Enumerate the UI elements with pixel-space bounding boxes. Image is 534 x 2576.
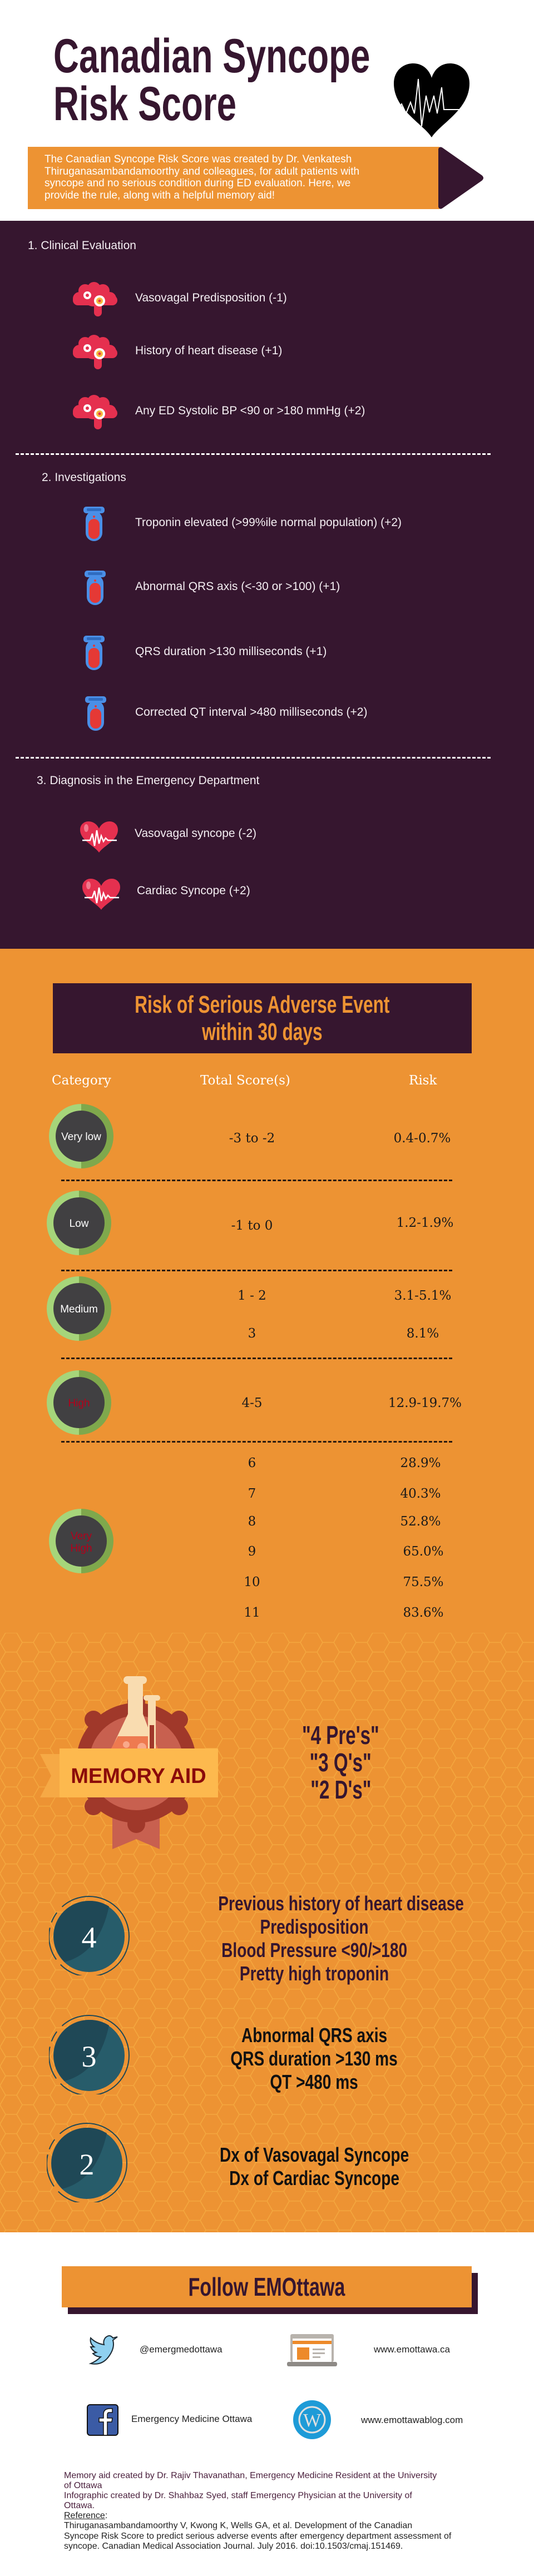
row: high: High — [68, 1398, 90, 1409]
item: history of heart disease: History of heart disease (+1) — [135, 344, 282, 357]
row: low: Low — [70, 1218, 89, 1230]
panel: risk table (orange): 83.6% — [403, 1606, 444, 1620]
mnemonic: 2 D's — [220, 2143, 409, 2189]
intro text: provide the rule, along with a helpful memory aid! — [44, 190, 275, 201]
follow EMOttawa banner — [62, 2266, 478, 2314]
mnemonic: 2 D's: Dx of Vasovagal Syncope — [220, 2143, 409, 2166]
group 3: circle + text — [49, 2015, 398, 2094]
intro text: syncope and no serious condition during ED evaluation. Here, we — [44, 177, 350, 189]
follow EMOttawa banner: Follow EMOttawa — [189, 2272, 345, 2301]
row: very low: -3 to -2 — [229, 1131, 275, 1146]
row: very high: 6 — [248, 1456, 256, 1470]
icon: memory aid badge — [40, 1676, 218, 1849]
risk title box: within 30 days — [202, 1018, 323, 1046]
row: high: 12.9-19.7% — [388, 1396, 462, 1410]
risk title box — [53, 983, 472, 1053]
footer credits and reference: Syncope Risk Score to predict serious adverse events after emergency department assessment of — [64, 2532, 451, 2541]
item: QT interval — [85, 696, 367, 731]
item: QRS axis — [85, 571, 340, 605]
social: facebook — [87, 2404, 253, 2436]
group 4: circle + text: 4 — [81, 1921, 97, 1954]
item: vasovagal predisposition: Vasovagal Predisposition (-1) — [135, 291, 287, 304]
group 4: circle + text — [49, 1892, 464, 1985]
mnemonic: 3 Q's — [231, 2024, 398, 2093]
item: QRS duration — [83, 636, 327, 670]
item: vasovagal syncope — [80, 821, 256, 853]
row: very high: 9 — [248, 1544, 256, 1559]
footer credits and reference: Thiruganasambandamoorthy V, Kwong K, Wells GA, et al. Development of the Canadian — [64, 2521, 412, 2530]
row: medium: 8.1% — [407, 1326, 439, 1341]
footer credits and reference — [64, 2471, 452, 2551]
social: twitter — [89, 2335, 222, 2365]
row: medium: 1 - 2 — [238, 1289, 266, 1303]
social: wordpress blog: W — [303, 2410, 322, 2431]
table header: Total Score(s) — [200, 1073, 290, 1088]
item: QRS duration: QRS duration >130 milliseconds (+1) — [135, 645, 327, 658]
row: very low: 0.4-0.7% — [394, 1131, 451, 1146]
memory aid summary — [302, 1721, 379, 1804]
table header: Category — [52, 1073, 111, 1088]
row: medium: 3.1-5.1% — [394, 1289, 451, 1303]
heading: diagnosis: 3. Diagnosis in the Emergency Department — [37, 774, 259, 787]
item: troponin — [83, 507, 402, 541]
panel: risk table (orange): 75.5% — [403, 1575, 444, 1589]
row: very low: Very low — [61, 1131, 101, 1143]
social: wordpress blog — [293, 2400, 463, 2439]
risk title box: Risk of Serious Adverse Event — [135, 991, 390, 1018]
row: very high: 52.8% — [400, 1514, 441, 1529]
item: vasovagal syncope: Vasovagal syncope (-2) — [135, 827, 256, 840]
social: wordpress blog: www.emottawablog.com — [361, 2415, 463, 2425]
footer credits and reference: Ottawa. — [64, 2501, 95, 2510]
row: medium: Medium — [60, 1304, 98, 1315]
row: low: -1 to 0 — [231, 1218, 273, 1233]
item: systolic BP: Any ED Systolic BP <90 or >180 mmHg (+2) — [135, 404, 365, 417]
intro text — [44, 153, 359, 201]
intro text: Thiruganasambandamoorthy and colleagues, for adult patients with — [44, 166, 359, 177]
memory aid summary: "2 D's" — [310, 1775, 371, 1804]
panel: criteria (dark) — [0, 221, 534, 949]
row: very high: 28.9% — [400, 1456, 441, 1470]
social: website — [287, 2334, 450, 2366]
row: very high: 8 — [248, 1514, 256, 1529]
header: title — [53, 29, 370, 131]
social: website: www.emottawa.ca — [374, 2344, 450, 2355]
intro text: The Canadian Syncope Risk Score was created by Dr. Venkatesh — [44, 153, 352, 165]
row: very high: Very — [71, 1530, 92, 1542]
group 3: circle + text: 3 — [81, 2040, 97, 2073]
mnemonic: 4 Pre's: Blood Pressure <90/>180 — [221, 1939, 407, 1961]
item: QT interval: Corrected QT interval >480 milliseconds (+2) — [135, 706, 367, 719]
footer credits and reference: syncope. Canadian Medical Association Journal. July 2016. doi:10.1503/cmaj.151469. — [64, 2542, 403, 2551]
table header — [52, 1073, 437, 1088]
item: troponin: Troponin elevated (>99%ile normal population) (+2) — [135, 516, 402, 529]
row: very low — [49, 1104, 451, 1168]
row: high — [47, 1370, 462, 1435]
item: systolic BP — [73, 395, 365, 429]
row: medium — [47, 1276, 451, 1341]
row: low — [47, 1191, 453, 1255]
heading: investigations: 2. Investigations — [42, 471, 126, 484]
icon: heart with ECG — [394, 63, 469, 137]
item: history of heart disease — [73, 335, 282, 369]
row: high: 4-5 — [241, 1396, 263, 1410]
panel: risk table (orange) — [0, 949, 534, 1633]
social: twitter: @emergmedottawa — [140, 2344, 222, 2355]
header: title: Risk Score — [53, 77, 236, 131]
panel: memory aid (hex pattern) — [0, 1633, 534, 2232]
intro callout banner — [28, 147, 483, 209]
mnemonic: 4 Pre's: Predisposition — [260, 1915, 369, 1938]
group 2: circle + text — [47, 2123, 409, 2202]
mnemonic: 3 Q's: QT >480 ms — [270, 2070, 358, 2093]
footer credits and reference: Reference: — [64, 2511, 107, 2520]
panel: risk table (orange): 11 — [244, 1606, 260, 1620]
footer credits and reference: of Ottawa — [64, 2481, 102, 2490]
row: low: 1.2-1.9% — [397, 1216, 453, 1230]
row: very high: 7 — [248, 1487, 256, 1501]
row: very high — [49, 1456, 444, 1620]
row: very high: High — [70, 1543, 92, 1554]
mnemonic: 3 Q's: Abnormal QRS axis — [241, 2024, 387, 2047]
item: QRS axis: Abnormal QRS axis (<-30 or >100) (+1) — [135, 580, 340, 593]
mnemonic: 3 Q's: QRS duration >130 ms — [231, 2047, 398, 2070]
mnemonic: 4 Pre's: Previous history of heart disease — [218, 1892, 464, 1915]
mnemonic: 4 Pre's — [218, 1892, 464, 1985]
row: very high: 65.0% — [403, 1544, 444, 1559]
table header: Risk — [409, 1073, 437, 1088]
memory aid summary: "3 Q's" — [310, 1748, 372, 1777]
icon: memory aid badge: MEMORY AID — [71, 1765, 206, 1788]
social: facebook: Emergency Medicine Ottawa — [131, 2414, 252, 2424]
row: medium: 3 — [248, 1326, 256, 1341]
group 2: circle + text: 2 — [79, 2148, 95, 2181]
heading: clinical evaluation: 1. Clinical Evaluation — [28, 239, 136, 252]
row: very high: 40.3% — [400, 1487, 441, 1501]
header: title: Canadian Syncope — [53, 29, 370, 83]
item: cardiac syncope — [82, 879, 250, 910]
mnemonic: 2 D's: Dx of Cardiac Syncope — [229, 2167, 399, 2189]
footer credits and reference: Infographic created by Dr. Shahbaz Syed, staff Emergency Physician at the University of — [64, 2491, 412, 2500]
panel: risk table (orange): 10 — [244, 1575, 260, 1589]
footer credits and reference: Memory aid created by Dr. Rajiv Thavanathan, Emergency Medicine Resident at the University — [64, 2471, 437, 2480]
item: cardiac syncope: Cardiac Syncope (+2) — [137, 884, 250, 897]
item: vasovagal predisposition — [73, 282, 287, 316]
memory aid summary: "4 Pre's" — [302, 1721, 379, 1750]
mnemonic: 4 Pre's: Pretty high troponin — [240, 1962, 389, 1985]
